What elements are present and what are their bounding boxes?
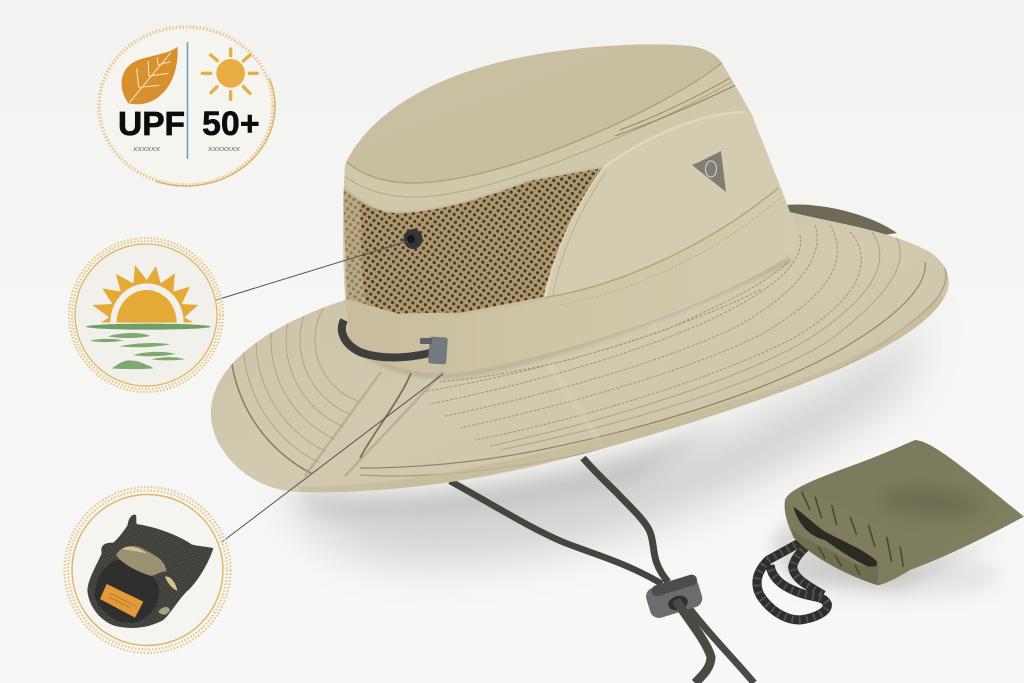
50+ label: 50+ <box>202 105 260 143</box>
small caption right: xxxxxxx <box>207 146 241 153</box>
toggle <box>644 573 711 683</box>
bag gathered opening <box>785 489 910 574</box>
far brim underside <box>786 205 897 240</box>
badge: packed hat <box>64 487 230 653</box>
icon: sun <box>202 49 257 99</box>
brim stitching: left concentric arcs <box>231 307 360 474</box>
icon: sunrise <box>86 265 211 369</box>
strap and clip <box>342 320 448 365</box>
chin cord with toggle <box>450 458 754 683</box>
icon: folded hat pouch <box>87 515 213 628</box>
divider <box>186 42 188 159</box>
brim stitching: front and right <box>300 225 946 492</box>
icon: leaf <box>122 47 178 104</box>
small caption left: xxxxxx <box>132 146 161 153</box>
beaded cord <box>757 537 827 620</box>
brim <box>211 212 949 492</box>
crown top panel <box>345 44 722 183</box>
badge: sun over water <box>69 238 223 392</box>
UPF label: UPF <box>118 106 185 143</box>
drawstring bag <box>757 440 1024 620</box>
side logo <box>692 151 726 192</box>
mesh vent <box>343 167 603 314</box>
ground shadow <box>280 310 1000 597</box>
crown <box>343 44 798 372</box>
side panel <box>750 112 790 212</box>
hat <box>211 44 949 492</box>
eyelet <box>404 229 422 249</box>
crown upper band <box>344 64 750 187</box>
band <box>346 212 790 372</box>
bag body <box>785 440 1024 585</box>
shadow under crown <box>345 260 790 376</box>
badge: UPF 50+ <box>98 26 275 186</box>
bag shadow <box>772 520 1010 590</box>
leader lines <box>213 241 443 548</box>
